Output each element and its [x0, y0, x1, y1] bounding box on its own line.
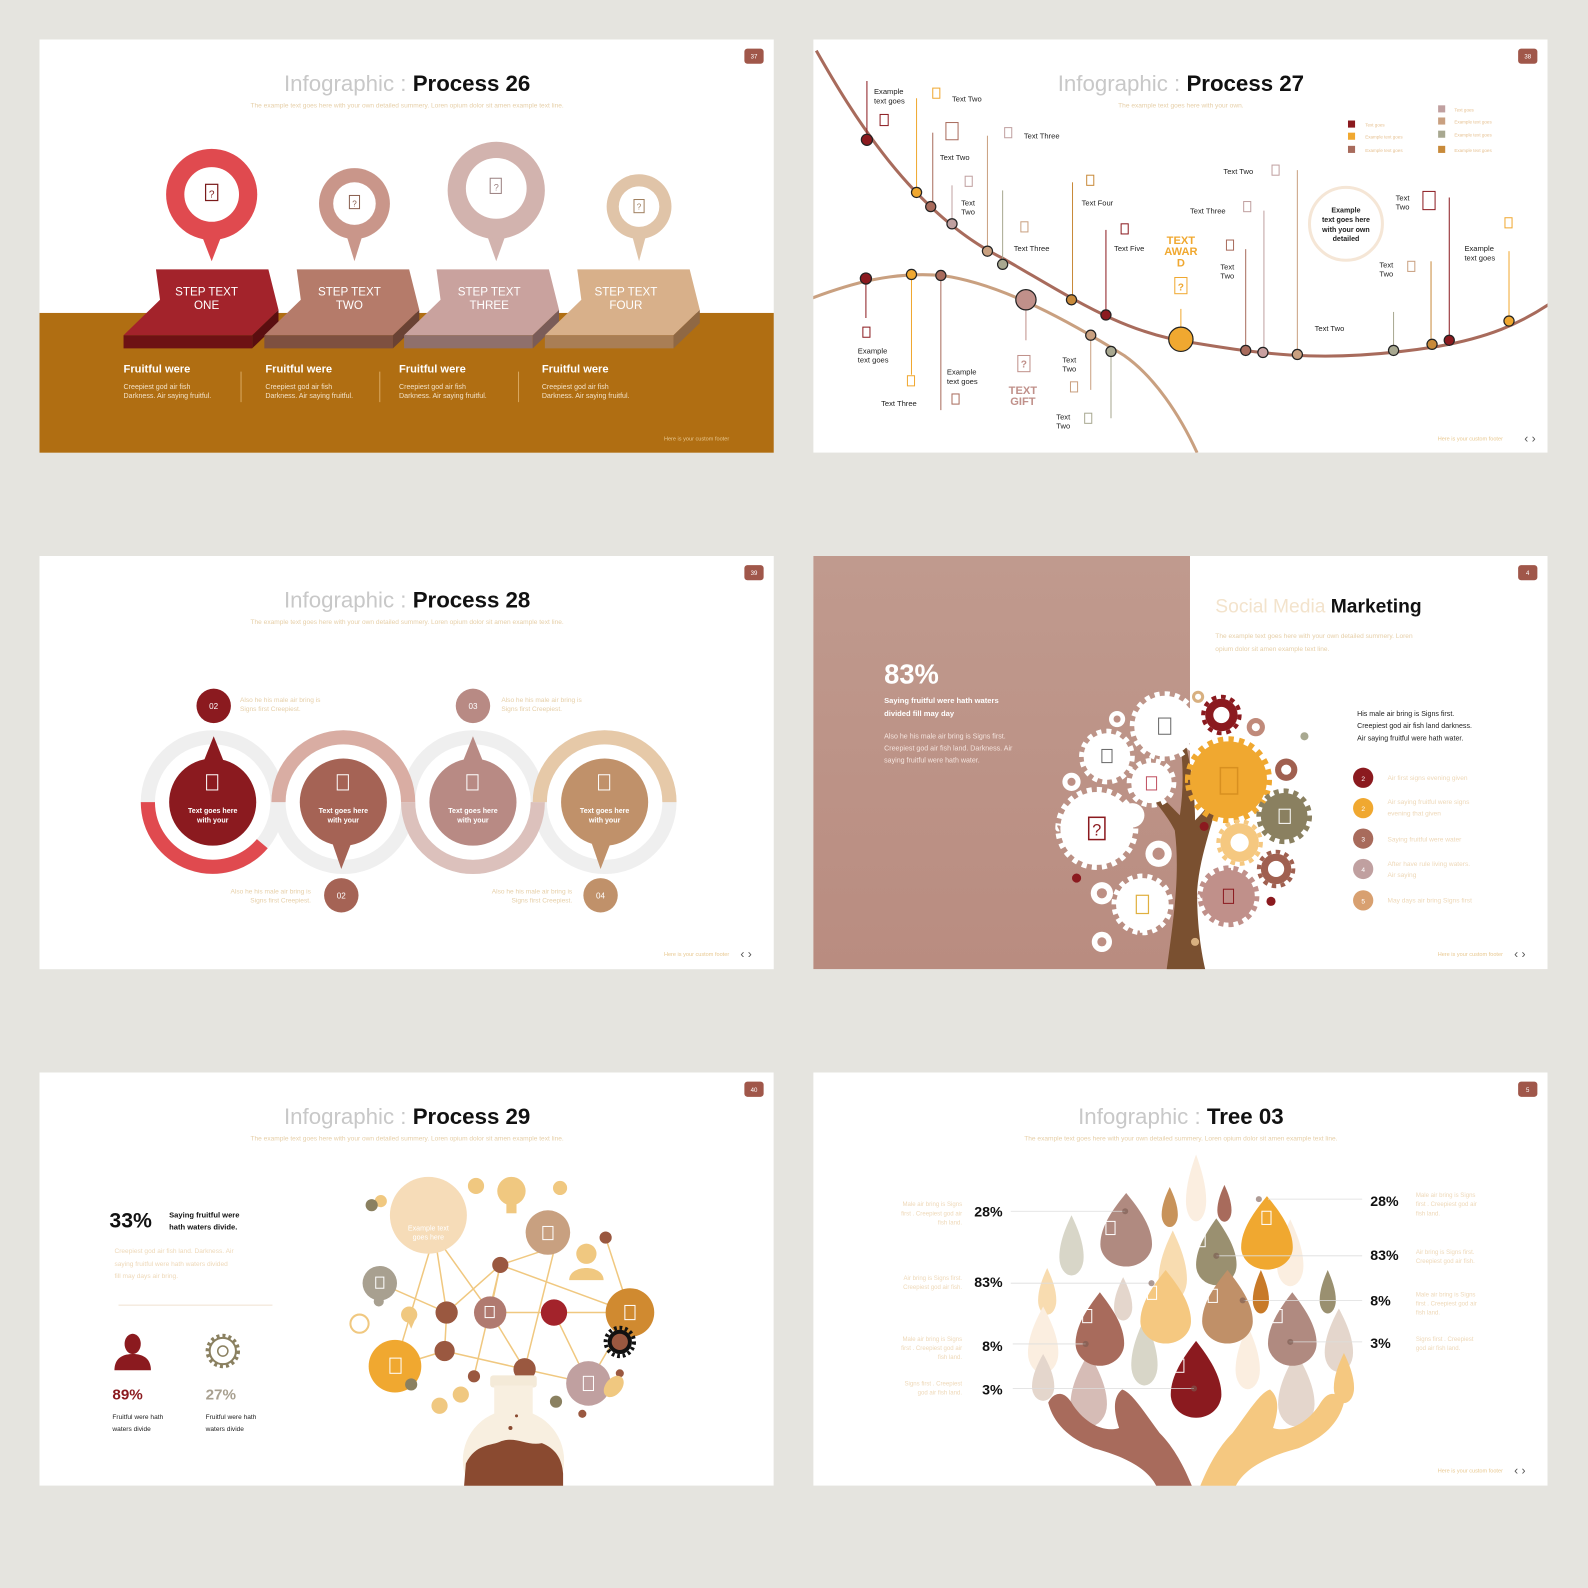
timeline curves	[810, 51, 1550, 453]
leaf icons	[1083, 1211, 1282, 1372]
step circle 4	[561, 759, 648, 869]
timeline labels: Text Three	[881, 399, 917, 408]
timeline labels: Text Two	[940, 153, 970, 162]
page badge: 38	[1524, 55, 1532, 61]
pin 2	[319, 168, 390, 261]
step circle 1: with your	[196, 816, 229, 824]
stat 33%: saying fruitful were hath waters divided	[114, 1261, 228, 1268]
timeline labels: Text	[1062, 356, 1077, 365]
panel: tree 03: fish land.	[938, 1220, 962, 1226]
timeline labels: Text Four	[1082, 199, 1114, 208]
pin 1	[166, 149, 257, 261]
timeline labels: text goes	[874, 96, 905, 105]
stat 83%	[884, 659, 1013, 765]
timeline labels: Example	[947, 368, 976, 377]
panel: tree 03: first . Creepiest god air	[901, 1346, 962, 1352]
stat 83%: Also he his male air bring is Signs first.	[884, 732, 1006, 740]
step descriptions: Fruitful were	[124, 364, 190, 376]
timeline dots	[860, 134, 1514, 360]
stats: waters divide	[205, 1426, 244, 1433]
panel: process 27	[810, 39, 1550, 453]
callout circle: text goes here	[1322, 216, 1370, 224]
timeline labels: text goes	[1464, 253, 1495, 262]
rings	[148, 737, 669, 867]
number badges: 03	[468, 702, 478, 711]
step 2: TWO	[336, 299, 363, 312]
step circle 2: Text goes here	[319, 807, 368, 815]
annotations: Also he his male air bring is	[230, 888, 312, 895]
page badge	[744, 49, 764, 64]
step circle 4: Text goes here	[580, 807, 629, 815]
step descriptions: Darkness. Air saying fruitful.	[124, 392, 211, 400]
stat 33%	[109, 1208, 239, 1280]
callout circle: with your own	[1321, 226, 1370, 234]
panel: process 28: ‹ ›	[740, 947, 752, 961]
timeline labels: Text	[1379, 260, 1394, 269]
icon: gear	[208, 1336, 238, 1366]
timeline labels: Two	[1396, 203, 1409, 212]
network diagram: Example text	[408, 1225, 449, 1233]
step circle 3: with your	[456, 816, 489, 824]
step descriptions: Fruitful were	[542, 364, 609, 376]
stat 33%: Saying fruitful were	[169, 1210, 239, 1219]
stat 33%: Creepiest god air fish land. Darkness. Air	[114, 1248, 234, 1255]
flask	[462, 1375, 564, 1486]
title: Infographic : Process 29	[284, 1104, 530, 1129]
timeline labels: Text Two	[1315, 324, 1344, 333]
numbered list: May days air bring Signs first	[1387, 897, 1472, 904]
small icons	[863, 88, 1512, 423]
legend: Example text goes	[1454, 120, 1492, 125]
step descriptions	[124, 364, 630, 402]
legend: Text goes	[1454, 107, 1475, 112]
step descriptions: Fruitful were	[265, 364, 332, 376]
legend: Example text goes	[1454, 148, 1492, 153]
panel: tree 03: fish land.	[1416, 1311, 1440, 1317]
panel: process 28: Here is your custom footer	[664, 952, 729, 958]
pin 4	[607, 174, 671, 261]
title: Infographic : Process 27	[1058, 71, 1304, 96]
page badge: 5	[1526, 1088, 1530, 1094]
panel: tree 03: first . Creepiest god air	[901, 1211, 962, 1217]
left percentages: 3%	[982, 1383, 1003, 1399]
legend: Example text goes	[1365, 148, 1403, 153]
heading: Social Media Marketing	[1215, 597, 1422, 618]
timeline labels: Text Five	[1114, 244, 1144, 253]
panel: process 27: Here is your custom footer	[1438, 437, 1503, 443]
timeline labels: Text Two	[952, 94, 982, 103]
page badge: 40	[751, 1088, 758, 1094]
timeline labels	[858, 87, 1495, 430]
stats: Fruitful were hath	[206, 1414, 257, 1421]
stats	[112, 1390, 256, 1431]
text gift: GIFT	[1010, 396, 1036, 408]
panel: social media marketing: The example text goes here with your own detailed summery. Loren	[1215, 633, 1413, 640]
stats: 89%	[112, 1387, 143, 1404]
page badge	[1518, 565, 1537, 580]
network diagram	[350, 1177, 654, 1418]
connector lines	[1011, 1199, 1362, 1388]
numbered list: evening that given	[1387, 810, 1441, 817]
numbered list: 4	[1361, 867, 1365, 874]
stat 83%: 83%	[884, 659, 939, 690]
step 3: STEP TEXT	[458, 286, 521, 299]
page badge	[744, 565, 764, 580]
annotations: Also he his male air bring is	[492, 888, 573, 895]
text gift: ?	[1021, 360, 1027, 371]
annotations	[230, 697, 582, 904]
panel: tree 03: Creepiest god air fish.	[903, 1285, 962, 1291]
step circle 2: with your	[327, 816, 359, 824]
timeline labels: text goes	[858, 356, 889, 365]
panel: tree 03: god air fish land.	[918, 1391, 962, 1397]
stats: Fruitful were hath	[112, 1414, 164, 1421]
gears: ?	[1092, 822, 1101, 840]
pin 3	[448, 142, 545, 261]
step circle 4: with your	[588, 816, 621, 824]
text award: TEXT	[1167, 235, 1195, 247]
panel: process 29: The example text goes here with your own detailed summery. Loren opium dolor sit amen example text line.	[251, 1135, 564, 1142]
step descriptions: Creepiest god air fish	[399, 383, 466, 391]
legend	[1348, 105, 1492, 153]
text gift: TEXT	[1009, 385, 1037, 397]
numbered list: 2	[1361, 776, 1365, 783]
step 3: THREE	[469, 299, 509, 312]
stems	[866, 81, 1509, 418]
step descriptions: Darkness. Air saying fruitful.	[265, 392, 353, 400]
timeline labels: Text Three	[1014, 244, 1049, 253]
big leaves	[1076, 1193, 1317, 1418]
panel: process 26	[39, 39, 774, 453]
panel: tree 03: fish land.	[938, 1355, 962, 1361]
annotations: Also he his male air bring is	[240, 697, 321, 704]
title: Infographic : Tree 03	[1078, 1104, 1284, 1129]
panel: tree 03: Signs first . Creepiest	[1416, 1337, 1474, 1343]
legend: Example text goes	[1454, 133, 1492, 138]
timeline labels: Two	[1379, 269, 1393, 278]
annotations: Signs first Creepiest.	[240, 706, 301, 713]
timeline labels: Text Three	[1190, 207, 1226, 216]
step descriptions: Creepiest god air fish	[265, 383, 332, 391]
step descriptions: Darkness. Air saying fruitful.	[542, 392, 630, 400]
step circle 2	[300, 759, 387, 869]
page badge	[1518, 49, 1537, 64]
step circle 3: Text goes here	[448, 807, 498, 815]
panel: social media marketing: ‹ ›	[1514, 947, 1526, 961]
panel: social media marketing: opium dolor sit amen example text line.	[1215, 646, 1330, 653]
title: Infographic : Process 26	[284, 71, 530, 96]
timeline labels: Example	[858, 346, 887, 355]
callout circle	[1309, 187, 1382, 260]
icon: person	[114, 1334, 151, 1370]
panel: process 29	[39, 1073, 774, 1511]
timeline labels: Two	[961, 208, 975, 217]
timeline labels: Two	[1056, 421, 1070, 430]
pin 1: ?	[209, 189, 215, 200]
description: His male air bring is Signs first.	[1357, 710, 1454, 718]
panel: process 28: The example text goes here with your own detailed summery. Loren opium dolor sit amen example text line.	[251, 619, 564, 626]
tree trunk	[1156, 748, 1214, 970]
number badges: 04	[596, 891, 606, 900]
panel: tree 03: Male air bring is Signs	[902, 1337, 962, 1343]
panel: process 27: The example text goes here with your own.	[1118, 102, 1244, 109]
panel: tree 03: Air bring is Signs first.	[1416, 1250, 1475, 1256]
panel: process 26: Here is your custom footer	[664, 437, 729, 443]
panel: tree 03: Male air bring is Signs	[1416, 1193, 1475, 1199]
description: Air saying fruitful were hath water.	[1357, 734, 1463, 742]
pin 2: ?	[352, 200, 357, 209]
step descriptions: Creepiest god air fish	[542, 383, 609, 391]
timeline labels: Two	[1062, 365, 1076, 374]
right percentages	[1370, 1194, 1399, 1352]
step descriptions: Fruitful were	[399, 364, 466, 376]
stat 83%: Creepiest god air fish land. Darkness. Air	[884, 744, 1013, 752]
panel: tree 03: Signs first . Creepiest	[904, 1381, 962, 1387]
gears	[1058, 691, 1309, 952]
number badges: 02	[209, 702, 219, 711]
annotations: Signs first Creepiest.	[250, 897, 311, 904]
text award: ?	[1178, 283, 1184, 294]
left percentages: 83%	[974, 1275, 1003, 1291]
stat 33%: fill may days air bring.	[114, 1273, 178, 1280]
step 1	[124, 269, 279, 348]
panel: tree 03: first . Creepiest god air	[1416, 1301, 1477, 1307]
right percentages: 83%	[1370, 1248, 1399, 1264]
timeline labels: Two	[1220, 272, 1234, 281]
step descriptions: Creepiest god air fish	[124, 383, 191, 391]
numbered list	[1353, 768, 1472, 910]
numbered list: Air saying	[1387, 872, 1417, 879]
stats: waters divide	[111, 1426, 151, 1433]
panel: process 28	[39, 556, 774, 969]
panel: tree 03	[813, 1073, 1547, 1489]
step 2	[264, 269, 419, 348]
panel: tree 03: The example text goes here with your own detailed summery. Loren opium dolor sit amen example text line.	[1024, 1135, 1338, 1142]
timeline labels: Text	[961, 199, 976, 208]
step 4: STEP TEXT	[594, 286, 657, 299]
panel: social media marketing	[813, 556, 1547, 969]
step circle 3	[429, 736, 517, 846]
text award: D	[1177, 257, 1185, 269]
panel: tree 03: Here is your custom footer	[1438, 1469, 1503, 1475]
timeline labels: Example	[874, 87, 903, 96]
title: Infographic : Process 28	[284, 588, 530, 613]
panel: process 27: ‹ ›	[1524, 432, 1536, 446]
left percentages: 8%	[982, 1339, 1003, 1355]
timeline labels: Text Two	[1223, 167, 1253, 176]
page badge: 37	[751, 55, 758, 61]
page badge: 4	[1526, 571, 1530, 577]
description	[1357, 710, 1472, 742]
number badges: 02	[337, 891, 346, 900]
stat 33%: 33%	[109, 1208, 152, 1232]
step 1: ONE	[194, 299, 219, 312]
step 2: STEP TEXT	[318, 286, 381, 299]
stat 33%: hath waters divide.	[169, 1222, 237, 1231]
left percentages: 28%	[974, 1204, 1003, 1220]
panel: tree 03: fish land.	[1416, 1211, 1440, 1217]
timeline labels: text goes	[947, 377, 978, 386]
small leaves	[1028, 1155, 1354, 1427]
numbered list: 5	[1361, 898, 1365, 905]
panel: tree 03: ‹ ›	[1514, 1464, 1526, 1478]
panel: tree 03: Creepiest god air fish.	[1416, 1259, 1475, 1265]
timeline labels: Text	[1220, 262, 1235, 271]
numbered list: Saying fruitful were water	[1387, 837, 1462, 844]
step descriptions: Darkness. Air saying fruitful.	[399, 392, 487, 400]
stat 83%: divided fill may day	[884, 709, 955, 718]
panel: tree 03: first . Creepiest god air	[1416, 1202, 1477, 1208]
legend: Example text goes	[1365, 135, 1403, 140]
panel: social media marketing: Here is your custom footer	[1438, 952, 1503, 958]
timeline labels: Text Three	[1024, 132, 1060, 141]
stat 83%: Saying fruitful were hath waters	[884, 696, 999, 705]
numbered list: After have rule living waters.	[1387, 861, 1470, 868]
step circle 1	[169, 736, 256, 846]
timeline labels: Text	[1056, 412, 1071, 421]
step 1: STEP TEXT	[175, 286, 238, 299]
network diagram: goes here	[413, 1234, 444, 1242]
left percentages	[974, 1204, 1003, 1399]
step 3	[404, 269, 559, 348]
panel: tree 03: Male air bring is Signs	[1416, 1292, 1475, 1298]
legend: Text goes	[1365, 123, 1385, 128]
page badge	[744, 1082, 764, 1097]
text award	[1164, 235, 1198, 294]
panel: tree 03: Air bring is Signs first.	[903, 1276, 962, 1282]
annotations: Also he his male air bring is	[501, 697, 582, 704]
right percentages: 3%	[1370, 1336, 1391, 1352]
panel: tree 03: god air fish land.	[1416, 1346, 1461, 1352]
numbered list: 3	[1361, 837, 1365, 844]
numbered list: Air first signs evening given	[1387, 775, 1468, 782]
timeline labels: Text	[1396, 194, 1410, 203]
pin 3: ?	[494, 182, 499, 192]
text gift	[1009, 355, 1037, 408]
numbered list: Air saying fruitful were signs	[1387, 799, 1470, 806]
step 4: FOUR	[609, 299, 642, 312]
subtitle: The example text goes here with your own detailed summery. Loren opium dolor sit amen example text line.	[251, 102, 564, 109]
annotations: Signs first Creepiest.	[512, 897, 572, 904]
page badge	[1518, 1082, 1537, 1097]
text award: AWAR	[1164, 246, 1198, 258]
right percentages: 28%	[1370, 1194, 1399, 1210]
callout circle: Example	[1331, 207, 1361, 215]
step 4	[545, 269, 700, 348]
number badges	[196, 689, 618, 912]
page badge: 39	[751, 571, 758, 577]
timeline labels: Example	[1464, 244, 1494, 253]
annotations: Signs first Creepiest.	[501, 706, 562, 713]
stats: 27%	[206, 1387, 236, 1404]
stat 83%: saying fruitful were hath water.	[884, 757, 980, 765]
description: Creepiest god air fish land darkness.	[1357, 722, 1472, 730]
callout circle: detailed	[1333, 235, 1359, 243]
hands	[1048, 1390, 1344, 1489]
right percentages: 8%	[1370, 1293, 1391, 1309]
step circle 1: Text goes here	[188, 807, 237, 815]
numbered list: 2	[1361, 806, 1365, 813]
panel: tree 03: Male air bring is Signs	[902, 1202, 962, 1208]
pin 4: ?	[637, 203, 642, 212]
